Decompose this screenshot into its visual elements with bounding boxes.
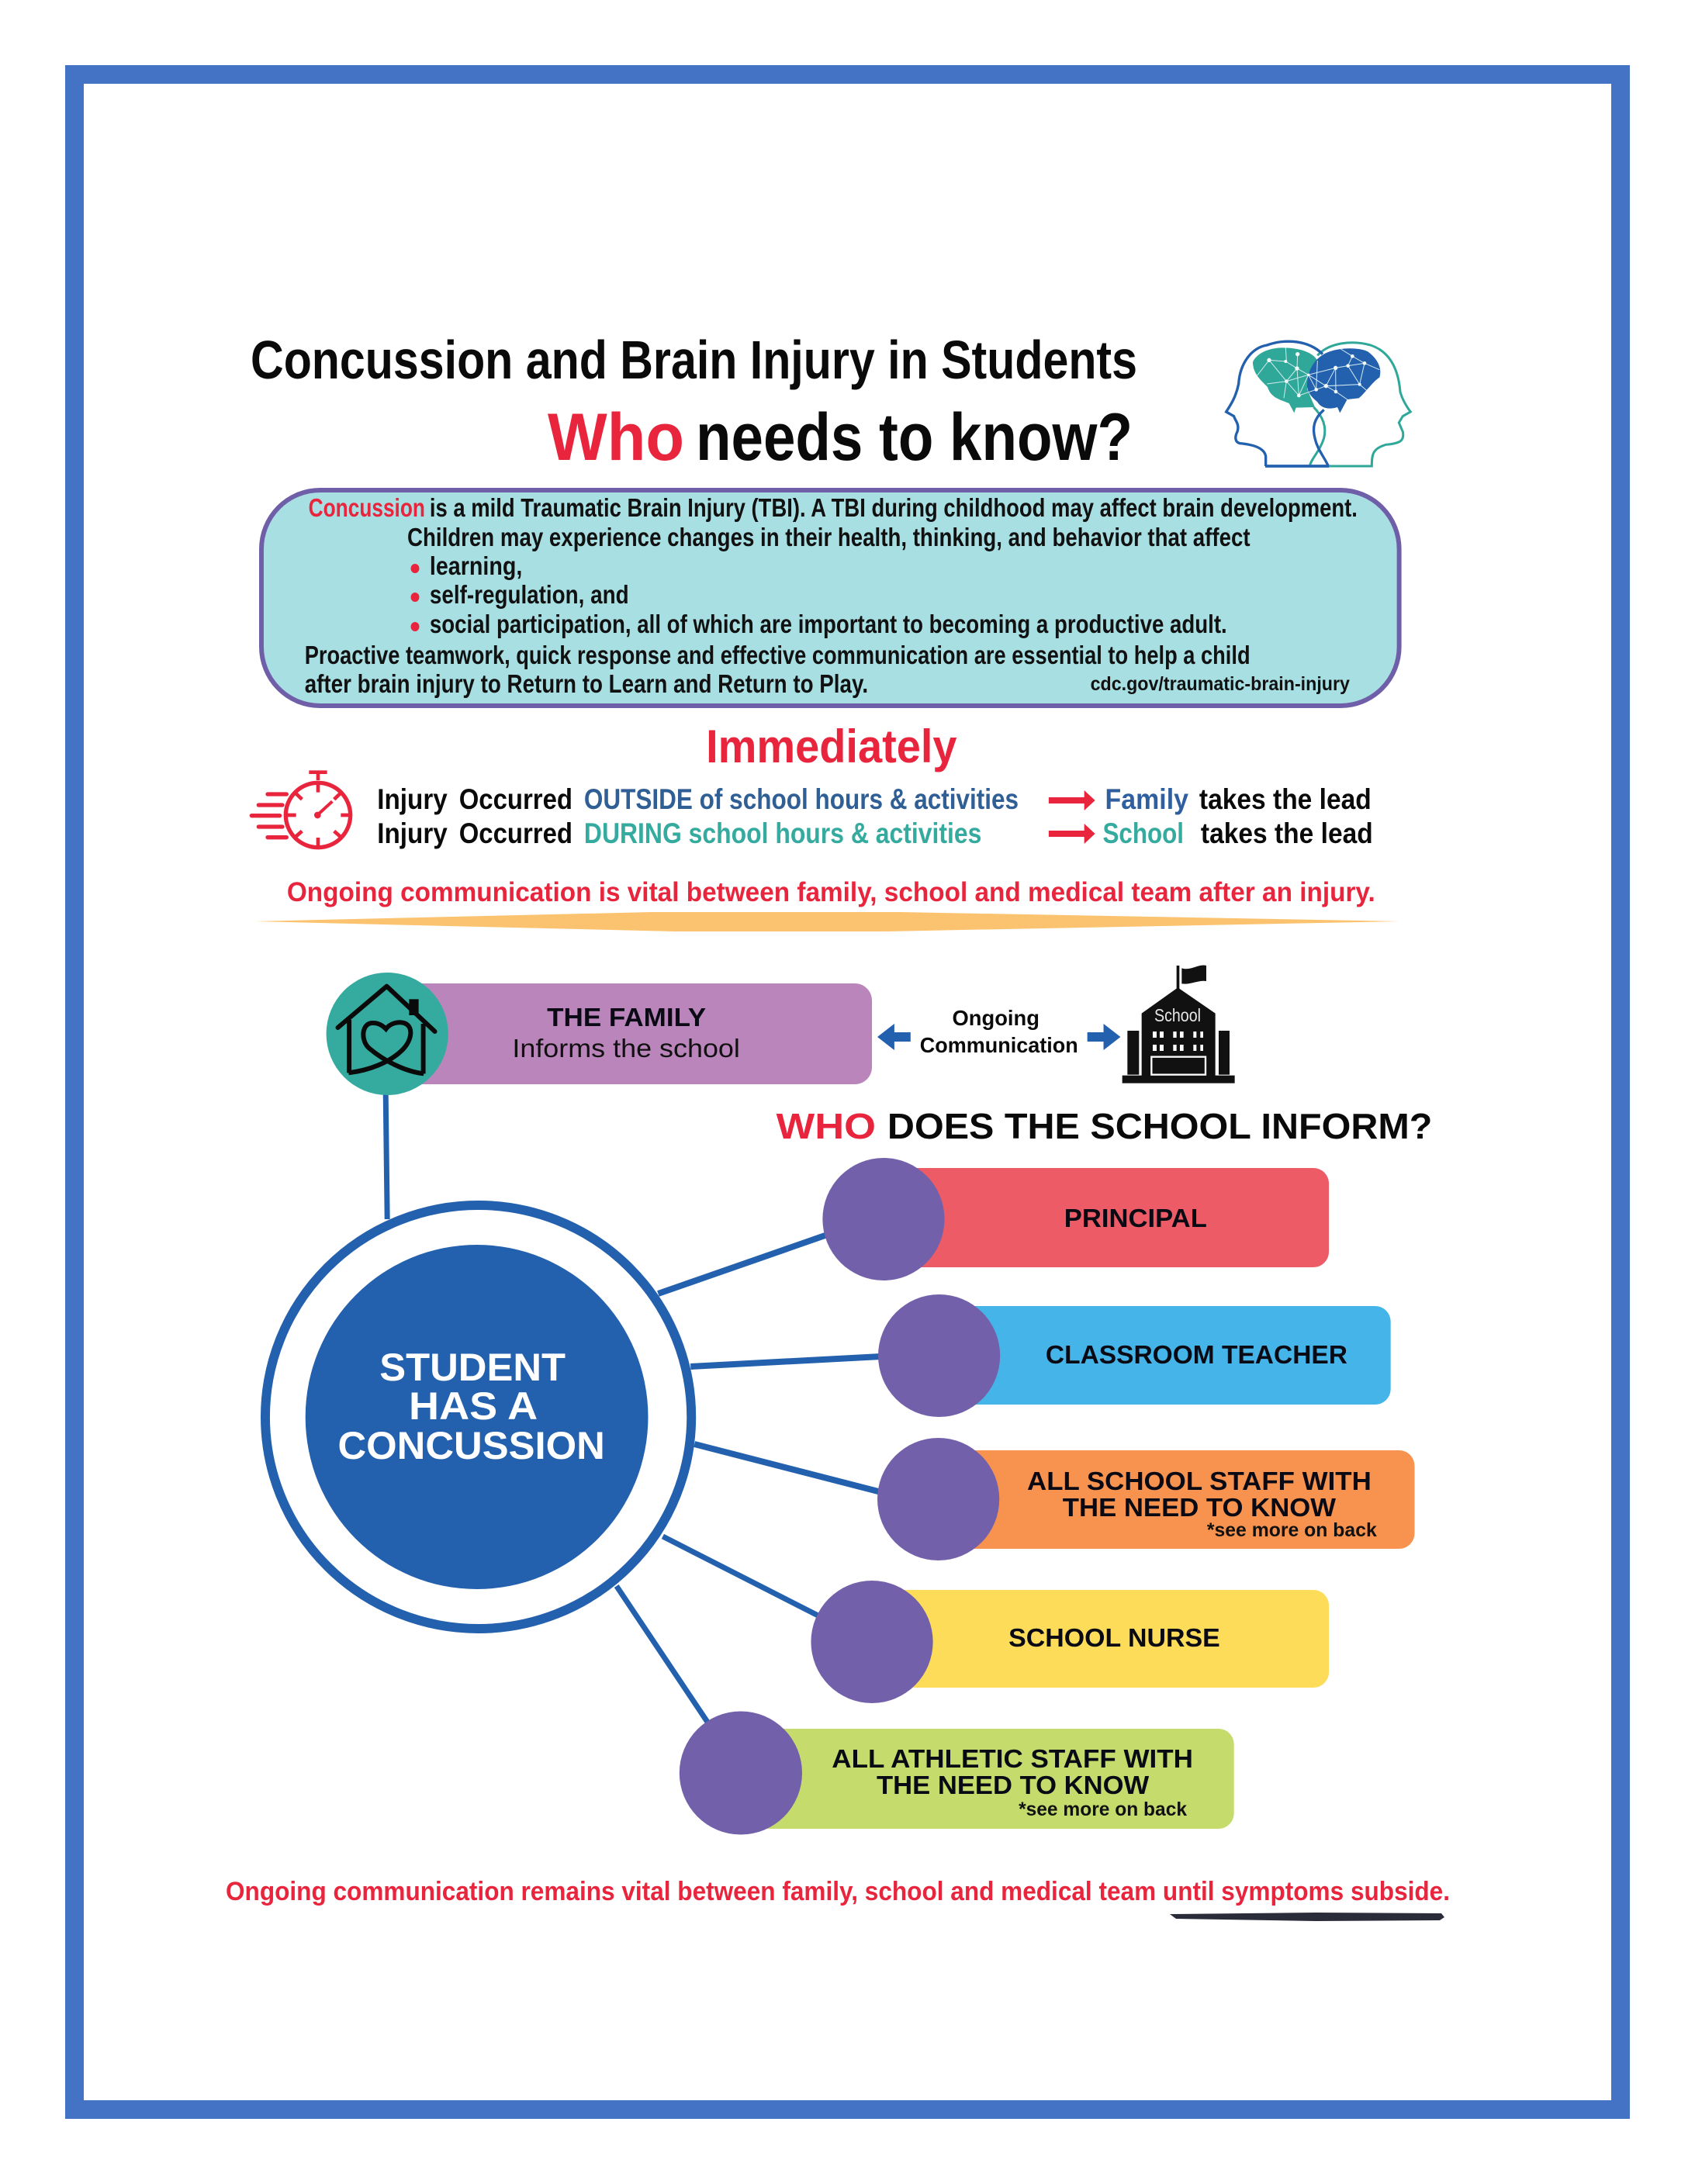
text: proactive teamwork	[305, 641, 1250, 698]
row: injury during school hours: Occurred	[459, 817, 572, 849]
arrow: to family	[1049, 790, 1095, 810]
arrow: left communication	[877, 1024, 911, 1050]
source link: cdc.gov/traumatic-brain-injury	[1091, 673, 1350, 695]
bar: all athletic staff: *see more on back	[1019, 1799, 1187, 1820]
bullet list	[411, 551, 1227, 638]
arrow: right communication	[1088, 1024, 1120, 1050]
central circle: student has a concussion: STUDENT	[379, 1346, 566, 1389]
heading: who does the school inform: DOES THE SCHOOL INFORM?	[887, 1106, 1432, 1146]
bar: all school staff: THE NEED TO KNOW	[1063, 1493, 1337, 1522]
bar: all athletic staff: THE NEED TO KNOW	[877, 1771, 1150, 1799]
bar: all athletic staff	[680, 1711, 1234, 1835]
row: injury during school hours: Injury	[377, 817, 448, 849]
heading: who does the school inform: WHO	[777, 1106, 876, 1146]
text: proactive teamwork: after brain injury to Return to Learn and Return to Play.	[305, 669, 868, 698]
bar: principal: PRINCIPAL	[1064, 1204, 1207, 1232]
definition text: concussion is a mild TBI: is a mild Traumatic Brain Injury (TBI). A TBI during childhood may affect brain development.	[430, 493, 1358, 522]
title block	[251, 330, 1137, 475]
text: children may experience changes: Children may experience changes in their health, thinking, and behavior that affect	[407, 523, 1250, 551]
row: injury outside school hours	[377, 783, 1372, 815]
definition text: concussion is a mild TBI: Concussion	[309, 493, 425, 522]
bar: classroom teacher: CLASSROOM TEACHER	[1046, 1340, 1347, 1369]
bullet list: learning,	[430, 551, 522, 580]
orange brush divider	[254, 912, 1399, 931]
title: concussion and brain injury in students: Concussion and Brain Injury in Students	[251, 330, 1137, 390]
bar: all school staff: *see more on back	[1207, 1519, 1377, 1541]
row: injury outside school hours: Occurred	[459, 783, 572, 815]
bullet list: social participation, all of which are important to becoming a productive adult.	[430, 610, 1227, 638]
brush underline	[1170, 1913, 1444, 1921]
callout: ongoing communication is vital: Ongoing communication is vital between family, school and medical team after an injury.	[287, 877, 1375, 907]
bar: all school staff: ALL SCHOOL STAFF WITH	[1027, 1467, 1372, 1495]
bar: school nurse: SCHOOL NURSE	[1008, 1623, 1220, 1652]
row: injury during school hours: School	[1103, 817, 1184, 849]
row: injury outside school hours: takes the lead	[1199, 783, 1372, 815]
subtitle: who needs to know	[548, 400, 1133, 475]
connector: family to student	[386, 1094, 387, 1219]
row: injury during school hours: takes the lead	[1201, 817, 1373, 849]
bar: principal	[822, 1158, 1329, 1280]
row: injury outside school hours: Family	[1105, 783, 1188, 815]
label: the family: THE FAMILY	[547, 1003, 706, 1032]
row: injury outside school hours: OUTSIDE of school hours & activities	[584, 783, 1019, 815]
label: school on building: School	[1154, 1005, 1201, 1025]
subtitle: who needs to know: Who	[548, 400, 684, 475]
connector lines from student	[617, 1235, 881, 1726]
icon: house with heart	[337, 987, 435, 1073]
label: ongoing communication: Ongoing	[953, 1006, 1039, 1030]
bullet list: self-regulation, and	[430, 580, 629, 609]
row: injury outside school hours: Injury	[377, 783, 448, 815]
label: ongoing communication: Communication	[920, 1033, 1078, 1057]
heading: immediately: Immediately	[706, 721, 956, 772]
bar: classroom teacher	[878, 1294, 1391, 1417]
text: proactive teamwork: Proactive teamwork, quick response and effective communication are essential to help a child	[305, 641, 1250, 669]
icon: two heads with brains	[1226, 341, 1410, 466]
subtitle: who needs to know: needs to know?	[696, 400, 1133, 475]
label: ongoing communication	[920, 1006, 1078, 1057]
main content column	[261, 490, 1432, 1835]
central circle: student has a concussion: CONCUSSION	[337, 1424, 605, 1467]
bar: all school staff	[877, 1438, 1415, 1560]
icon: stopwatch	[251, 772, 351, 848]
arrow: to school	[1049, 824, 1095, 844]
callout: ongoing communication remains vital: Ongoing communication remains vital between family, school and medical team until symptoms subside.	[226, 1877, 1450, 1906]
row: injury during school hours	[377, 817, 1373, 849]
icon: school building	[1123, 966, 1235, 1083]
bar: school nurse	[811, 1581, 1329, 1703]
panel: the family	[327, 973, 872, 1095]
row: injury during school hours: DURING school hours & activities	[584, 817, 981, 849]
central circle: student has a concussion: HAS A	[409, 1384, 538, 1428]
bar: all athletic staff: ALL ATHLETIC STAFF WITH	[832, 1744, 1193, 1773]
label: informs the school: Informs the school	[512, 1034, 740, 1063]
panel: concussion definition	[261, 490, 1399, 706]
central circle: student has a concussion	[265, 1205, 691, 1629]
